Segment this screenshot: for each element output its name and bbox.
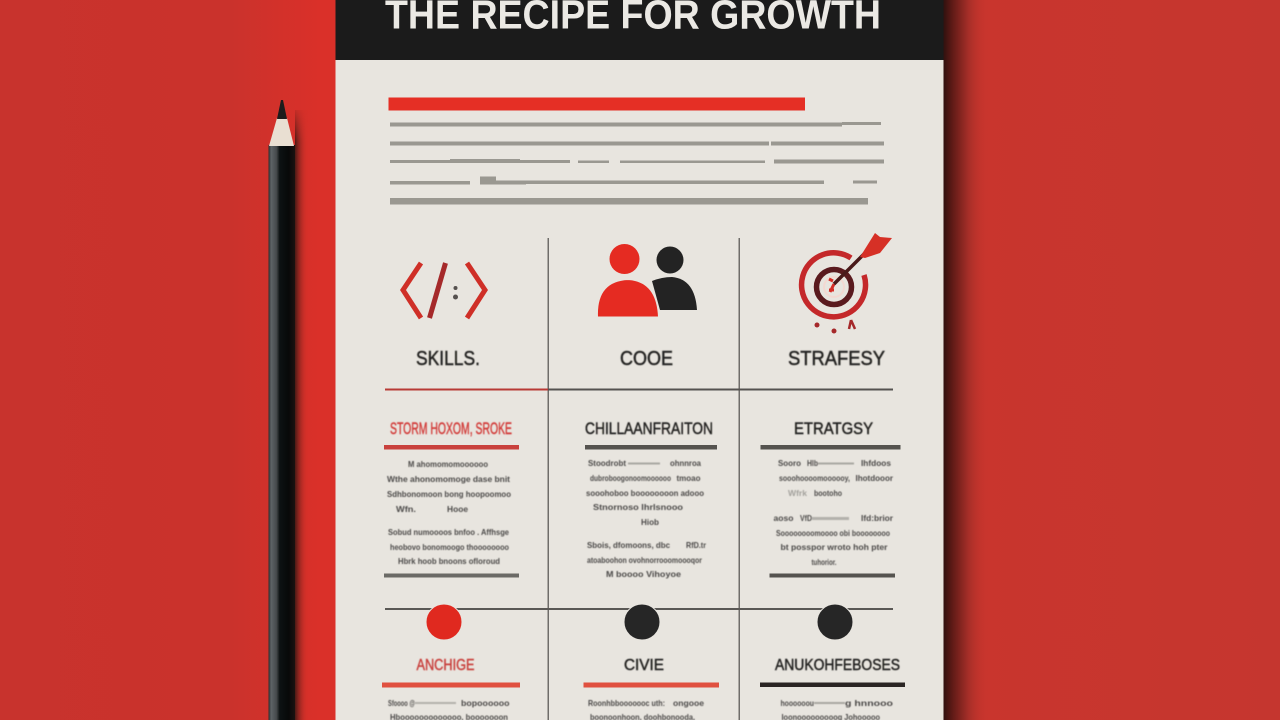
column 1 bottom: heading, rule and body: bopoooooo [461, 698, 510, 708]
column 3 middle: heading, rule and body: Sooro [778, 458, 801, 468]
column 2 middle: heading, rule and body: Stoodrobt [588, 458, 626, 468]
column 3 bottom: heading, rule and body [760, 657, 905, 720]
column 2 bottom: heading, rule and body: CIVIE [624, 657, 664, 674]
column 1 bottom: heading, rule and body: ANCHIGE [416, 657, 474, 674]
column 1 bottom: heading, rule and body [382, 657, 520, 720]
column 1 bottom: heading, rule and body: Sfoooo @ [388, 698, 415, 708]
column 1 middle: heading, rule and body: Sobud numoooos bnfoo . Affhsge [388, 527, 509, 537]
column 1 middle: heading, rule and body: Hooe [447, 504, 468, 514]
column 2 bottom: heading, rule and body: ongooe [673, 698, 704, 708]
column 2 middle: heading, rule and body: RfD.tr [686, 540, 707, 550]
column 1 middle: heading, rule and body: heobovo bonomoogo thoooooooo [390, 542, 509, 552]
column 3 middle: heading, rule and body: Ihotdooor [856, 473, 894, 483]
column 2 middle: heading, rule and body: sooohoboo boooooooon adooo [586, 488, 704, 498]
column 1 middle: heading, rule and body: Wfn. [396, 504, 416, 514]
icon: target with arrow [802, 233, 892, 334]
column 2 middle: heading, rule and body [585, 419, 717, 579]
column 3 middle: heading, rule and body: sooohoooomoooooy, [779, 473, 850, 483]
column 3 middle: heading, rule and body: ETRATGSY [794, 419, 873, 438]
column 3 middle: heading, rule and body: Ihfdoos [861, 458, 891, 468]
column 1 middle: heading, rule and body: M ahomomomoooooo [408, 459, 488, 469]
column 2 middle: heading, rule and body: CHILLAANFRAITON [585, 419, 713, 438]
column 3 bottom: heading, rule and body: hoooooou [780, 698, 814, 708]
icon labels: STRAFESY [788, 348, 885, 370]
column 1 middle: heading, rule and body: Wthe ahonomomoge dase bnit [387, 474, 510, 484]
column 3 middle: heading, rule and body: VfD [800, 513, 812, 523]
column 2 middle: heading, rule and body: tmoao [676, 473, 700, 483]
column 3 bottom: heading, rule and body: g hnnooo [845, 698, 893, 708]
column 2 middle: heading, rule and body: ohnnroa [670, 458, 701, 468]
column 1 middle: heading, rule and body: STORM HOXOM, SROKE [390, 419, 512, 438]
column 2 middle: heading, rule and body: Hiob [641, 517, 659, 527]
paper sheet [336, 0, 944, 720]
column 3 middle: heading, rule and body: bootoho [814, 488, 842, 498]
column 3 middle: heading, rule and body [760, 419, 900, 578]
column 2 middle: heading, rule and body: atoaboohon ovohnorrooomoooqor [587, 555, 703, 565]
icon labels: COOE [620, 348, 673, 370]
column 2 middle: heading, rule and body: M boooo Vihoyoe [606, 569, 681, 579]
column 2 middle: heading, rule and body: Sbois, dfomoons, dbc [587, 540, 670, 550]
column 1 middle: heading, rule and body: Sdhbonomoon bong hoopoomoo [387, 489, 511, 499]
column 2 bottom: heading, rule and body: Roonhbbooooooc uth: [588, 698, 665, 708]
column 3 middle: heading, rule and body: bt posspor wroto hoh pter [780, 542, 888, 552]
column 1 middle: heading, rule and body: Hbrk hoob bnoons ofloroud [398, 556, 500, 566]
header band [336, 0, 944, 60]
column 2 middle: heading, rule and body: dubroboogonoomoooooo [590, 473, 671, 483]
column 3 middle: heading, rule and body: Ifd:brior [861, 513, 894, 523]
icon labels: SKILLS. [416, 348, 480, 370]
timeline with markers [385, 604, 893, 640]
column 3 bottom: heading, rule and body: ANUKOHFEBOSES [775, 657, 900, 674]
pencil [268, 100, 308, 720]
intro block: red heading bar and text lines [388, 98, 884, 204]
column 3 middle: heading, rule and body: Soooooooomoooo obi boooooooo [776, 528, 890, 538]
column 3 middle: heading, rule and body: aoso [774, 513, 794, 523]
horizontal rule [385, 388, 893, 390]
column dividers [548, 238, 740, 720]
icon labels [416, 348, 885, 370]
icon: two people [597, 244, 697, 317]
column 3 middle: heading, rule and body: Hlb [807, 458, 818, 468]
icon: code brackets [403, 263, 485, 318]
column 3 middle: heading, rule and body: Wfrk [788, 488, 807, 498]
column 2 bottom: heading, rule and body [584, 657, 719, 720]
column 3 middle: heading, rule and body: tuhorior. [812, 557, 836, 567]
column 1 middle: heading, rule and body [384, 419, 519, 578]
paper shadow [943, 0, 989, 720]
column 2 middle: heading, rule and body: Stnornoso Ihrlsnooo [593, 502, 683, 512]
